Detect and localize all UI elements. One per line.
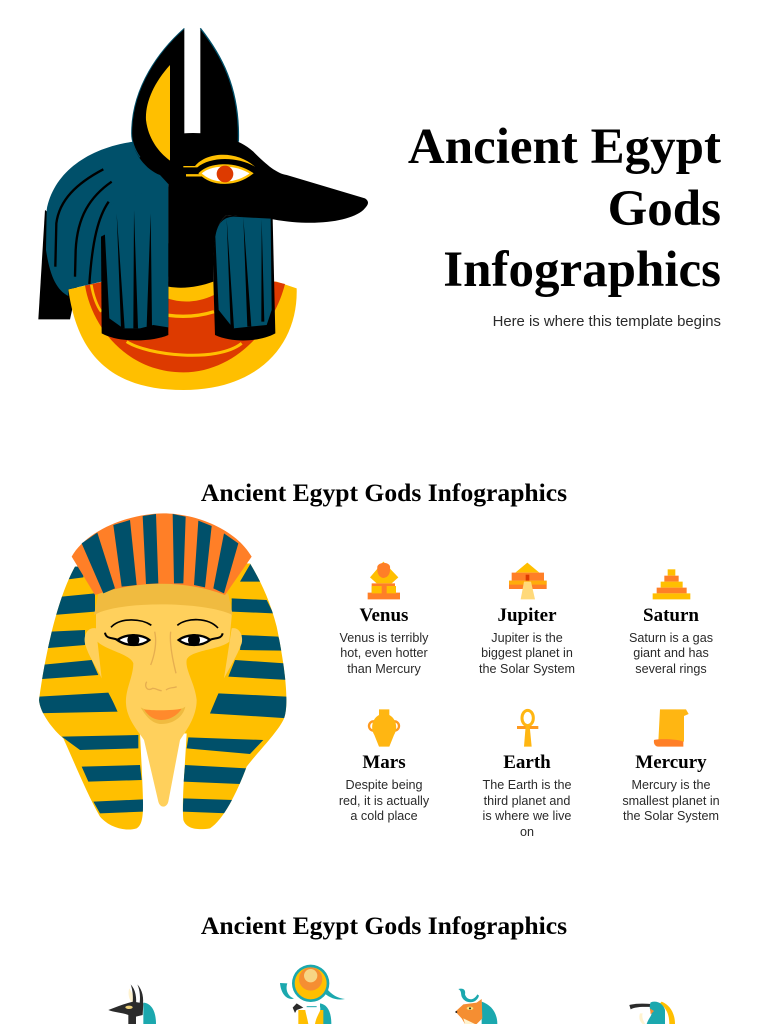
- item: Mercury: Mercury is the: [631, 778, 711, 792]
- icon: ankh: [517, 710, 538, 747]
- icon: Anubis eye: [183, 155, 255, 183]
- heading: section three: Ancient Egypt Gods Infographics: [201, 911, 567, 940]
- icon: pharaoh eyes: [105, 620, 223, 646]
- item: Earth: third planet and: [484, 794, 570, 808]
- item: Mercury: [622, 709, 720, 823]
- title: Ancient Egypt: [408, 119, 721, 175]
- item: Venus: [340, 562, 429, 676]
- item: Earth: [483, 710, 571, 839]
- item: Jupiter: the Solar System: [479, 662, 575, 676]
- item: Mercury: the Solar System: [623, 809, 719, 823]
- item: Saturn: Saturn: [643, 605, 699, 626]
- item: Earth: Earth: [503, 752, 551, 773]
- item: Mercury: Mercury: [635, 752, 707, 773]
- item: Jupiter: [479, 563, 575, 676]
- icon: vase: [369, 709, 399, 747]
- item: Mercury: smallest planet in: [622, 794, 720, 808]
- item: Mars: red, it is actually: [339, 794, 430, 808]
- icon: temple: [509, 563, 547, 599]
- heading: section two: Ancient Egypt Gods Infographics: [201, 478, 567, 507]
- icon: pyramid: [653, 569, 690, 599]
- illustration: pharaoh mask: [33, 513, 293, 837]
- title: [408, 119, 721, 298]
- figure: Ra: [280, 965, 345, 1024]
- icon: pharaoh nose and mouth: [141, 632, 185, 724]
- figure: ibis god: [629, 1002, 675, 1024]
- item: Jupiter: Jupiter is the: [491, 631, 563, 645]
- icon: sphinx: [368, 562, 400, 599]
- item: Jupiter: biggest planet in: [481, 646, 573, 660]
- item: Mars: Mars: [362, 752, 406, 773]
- subtitle: Here is where this template begins: [493, 314, 721, 330]
- item: Mars: [339, 709, 430, 823]
- icon: scroll: [654, 709, 689, 747]
- item: Saturn: [629, 569, 713, 676]
- illustration: Anubis head: [38, 28, 368, 390]
- figure: fox god: [455, 989, 497, 1024]
- item: Saturn: several rings: [635, 662, 707, 676]
- figure: Anubis: [108, 984, 156, 1024]
- title: Gods: [608, 181, 721, 237]
- item: Venus: Venus: [360, 605, 408, 626]
- item: Venus: hot, even hotter: [340, 646, 428, 660]
- item: Saturn: giant and has: [633, 646, 709, 660]
- item: Mars: a cold place: [350, 809, 418, 823]
- title: Infographics: [443, 242, 721, 298]
- item: Earth: The Earth is the: [483, 778, 571, 792]
- item: Saturn: Saturn is a gas: [629, 631, 713, 645]
- item: Jupiter: Jupiter: [497, 605, 557, 626]
- item: Mars: Despite being: [345, 778, 423, 792]
- item: Earth: is where we live: [483, 809, 571, 823]
- item: Earth: on: [520, 825, 534, 839]
- item: Venus: Venus is terribly: [340, 631, 429, 645]
- item: Venus: than Mercury: [347, 662, 421, 676]
